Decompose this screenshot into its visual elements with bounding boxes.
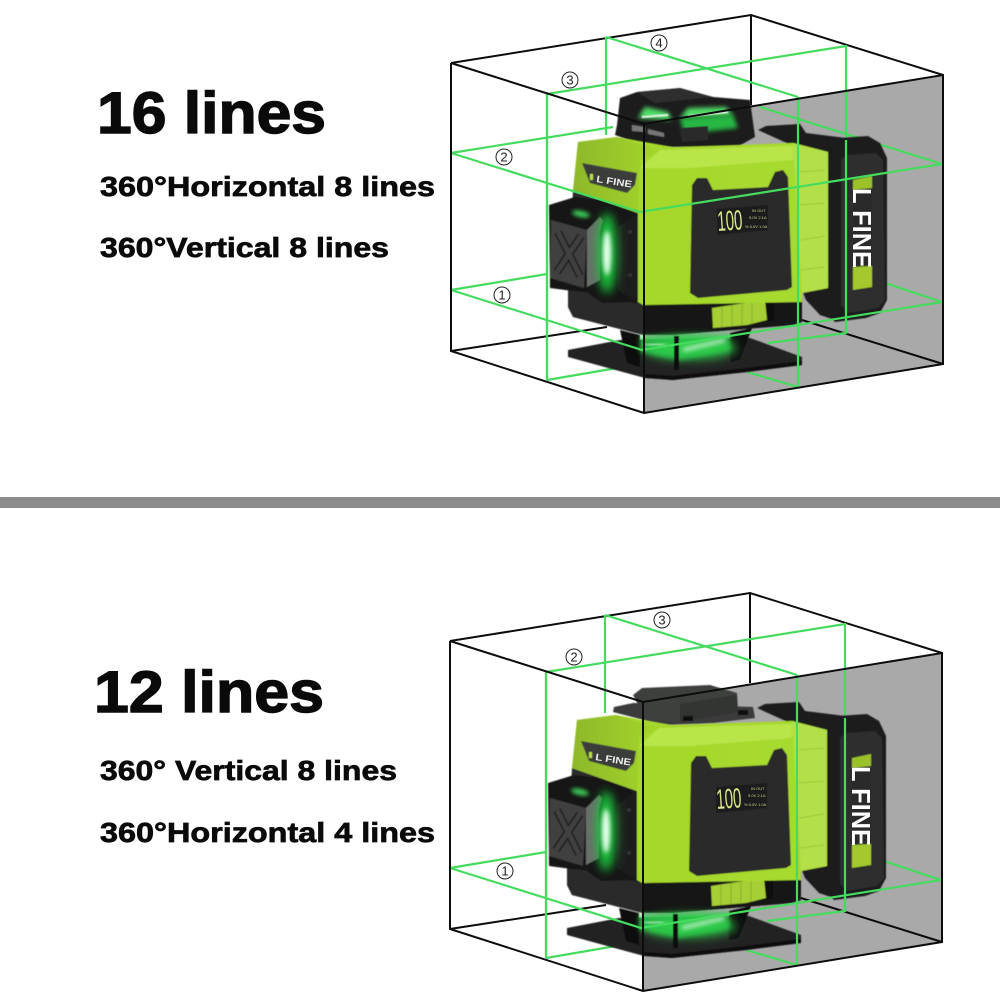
text: horizontal 8 lines: 360°Horizontal 8 lines [100,171,435,202]
divider band [0,497,1000,508]
number markers: 2 [570,650,578,664]
panel: 12-line laser diagram [450,593,942,991]
LCD details [745,208,768,229]
number markers: 4 [655,36,663,50]
title: 16 lines: 16 lines [97,81,326,146]
LCD details: 5.0V 2.1A [748,793,766,798]
front black box edges [451,63,943,413]
text: vertical 8 lines: 360° Vertical 8 lines [100,755,397,786]
number markers: 1 [498,288,506,302]
number markers: 3 [658,612,666,628]
front green laser lines [451,94,942,387]
panel: 12 lines heading and specs [94,660,435,848]
LCD details: IN OUT [751,786,765,791]
front green laser lines [450,672,941,965]
LCD details: % 5.0V 1.0A [744,802,767,807]
logo text: L FINE [596,174,633,191]
LCD details: IN OUT [752,208,766,213]
laser level device [548,702,886,958]
number markers: 3 [566,72,574,88]
number markers: 1 [501,864,509,878]
LCD details: 5.0V 2.1A [749,215,767,220]
text: horizontal 4 lines: 360°Horizontal 4 lines [100,817,435,848]
LCD reading: 100 [716,204,743,237]
number markers: 2 [500,150,508,164]
battery brand: L FINE [847,188,877,268]
gray wall and floor [643,653,942,991]
back green horizontal segments [451,107,942,164]
laser level device [549,124,887,380]
gray wall and floor [644,75,943,413]
title: 12 lines: 12 lines [94,660,324,725]
LCD details: % 5.0V 1.0A [745,224,768,229]
number markers [497,612,670,879]
panel: 16 lines heading and specs [97,81,435,263]
laser head top [615,88,755,147]
LCD details [744,786,767,807]
panel: 16-line laser diagram [451,15,943,413]
battery brand: L FINE [846,766,876,846]
text: vertical 8 lines: 360°Vertical 8 lines [100,232,389,263]
number markers [494,35,667,303]
front black box edges [450,641,942,991]
LCD reading: 100 [715,782,742,815]
logo text: L FINE [595,752,632,769]
laser head top [613,685,755,725]
